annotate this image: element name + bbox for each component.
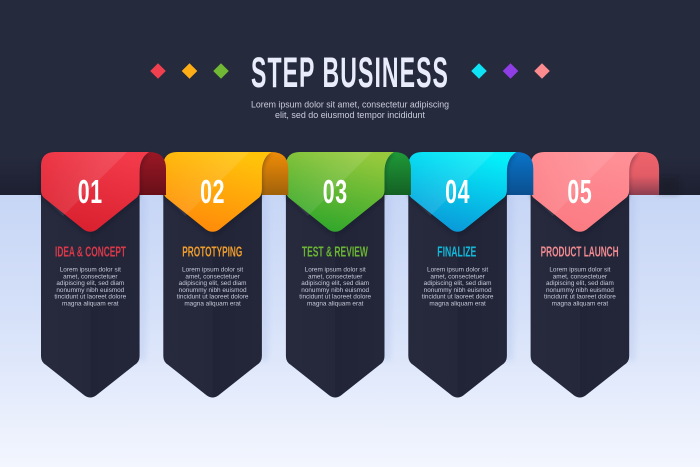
text block: amet, consectetuer bbox=[430, 273, 486, 280]
panel: step 1 bbox=[41, 152, 166, 398]
fold bbox=[366, 152, 411, 195]
ribbon head bbox=[408, 152, 516, 234]
text block: tincidunt ut laoreet dolore bbox=[54, 294, 127, 300]
panel: step 3 bbox=[286, 152, 411, 398]
text block: Lorem ipsum dolor sit bbox=[182, 266, 243, 274]
label: IDEA & CONCEPT bbox=[55, 244, 126, 260]
ribbon head bbox=[41, 152, 149, 234]
text block: nonummy nibh euismod bbox=[546, 287, 614, 294]
column body bbox=[163, 190, 262, 398]
ribbon head bbox=[286, 152, 394, 234]
text block: Lorem ipsum dolor sit bbox=[305, 266, 366, 274]
subtitle: elit, sed do eiusmod tempor incididunt bbox=[275, 110, 425, 121]
subtitle: Lorem ipsum dolor sit amet, consectetur adipiscing bbox=[251, 100, 449, 110]
title: STEP BUSINESS bbox=[251, 49, 449, 97]
column body bbox=[408, 190, 507, 398]
fold bbox=[243, 152, 288, 195]
number: 02 bbox=[200, 173, 225, 210]
text block: amet, consectetuer bbox=[553, 273, 608, 280]
text block: adipiscing elit, sed diam bbox=[56, 280, 124, 287]
panel: step 4 bbox=[408, 152, 533, 398]
number: 01 bbox=[78, 173, 103, 210]
text block: magna aliquam erat bbox=[307, 300, 364, 307]
label: PRODUCT LAUNCH bbox=[541, 244, 619, 260]
decorative diamonds right bbox=[471, 63, 550, 79]
ribbon head bbox=[531, 152, 639, 234]
number: 05 bbox=[567, 173, 592, 210]
text block bbox=[422, 266, 494, 307]
text block: nonummy nibh euismod bbox=[424, 287, 492, 294]
text block: nonummy nibh euismod bbox=[56, 287, 125, 294]
fold bbox=[488, 152, 533, 195]
text block: Lorem ipsum dolor sit bbox=[427, 266, 488, 274]
text block: magna aliquam erat bbox=[429, 300, 486, 307]
text block bbox=[299, 266, 372, 307]
text block: adipiscing elit, sed diam bbox=[179, 280, 247, 287]
text block: magna aliquam erat bbox=[184, 300, 241, 307]
column body bbox=[286, 190, 384, 398]
text block: amet, consectetuer bbox=[185, 273, 241, 280]
text block bbox=[54, 266, 127, 307]
column shadow bbox=[504, 196, 513, 361]
text block: nonummy nibh euismod bbox=[179, 287, 247, 294]
column shadow bbox=[259, 196, 268, 361]
subtitle bbox=[251, 100, 449, 121]
column shadow bbox=[137, 196, 146, 361]
fold bbox=[611, 152, 659, 195]
fold bbox=[121, 152, 166, 195]
text block: adipiscing elit, sed diam bbox=[301, 280, 369, 287]
column shadow bbox=[627, 196, 636, 361]
label: PROTOTYPING bbox=[182, 244, 242, 260]
label: FINALIZE bbox=[437, 244, 476, 260]
text block: Lorem ipsum dolor sit bbox=[549, 266, 611, 274]
text block: magna aliquam erat bbox=[62, 300, 119, 307]
column shadow bbox=[382, 196, 391, 361]
light lower background bbox=[0, 195, 700, 467]
text block bbox=[544, 266, 616, 307]
text block: nonummy nibh euismod bbox=[301, 287, 370, 294]
column body bbox=[41, 190, 140, 398]
text block: amet, consectetuer bbox=[63, 273, 118, 280]
panel: step 5 bbox=[531, 152, 679, 398]
column body bbox=[531, 190, 629, 398]
text block: tincidunt ut laoreet dolore bbox=[299, 294, 372, 300]
decorative diamonds left bbox=[150, 63, 229, 79]
text block: magna aliquam erat bbox=[552, 300, 608, 307]
text block: tincidunt ut laoreet dolore bbox=[422, 294, 494, 300]
label: TEST & REVIEW bbox=[302, 244, 368, 260]
number: 04 bbox=[445, 173, 470, 210]
text block: amet, consectetuer bbox=[308, 273, 363, 280]
text block: tincidunt ut laoreet dolore bbox=[177, 294, 249, 300]
panel: step 2 bbox=[163, 152, 288, 398]
text block: adipiscing elit, sed diam bbox=[546, 280, 614, 287]
ribbon head bbox=[163, 152, 271, 234]
text block bbox=[177, 266, 249, 307]
shadow beside fold bbox=[659, 178, 679, 194]
dark header background bbox=[0, 0, 700, 196]
text block: Lorem ipsum dolor sit bbox=[60, 266, 121, 274]
text block: adipiscing elit, sed diam bbox=[424, 280, 492, 287]
text block: tincidunt ut laoreet dolore bbox=[544, 294, 616, 300]
number: 03 bbox=[323, 173, 348, 210]
